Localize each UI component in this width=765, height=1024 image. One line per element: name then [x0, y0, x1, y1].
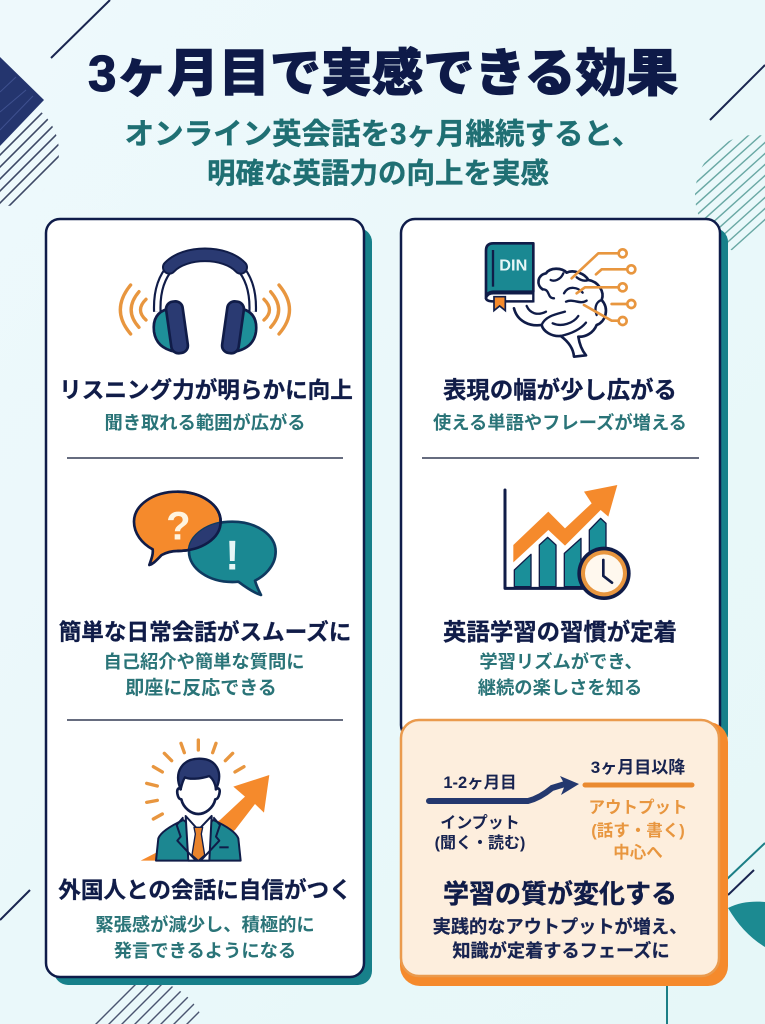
text: daily conversation detail: 即座に反応できる: [125, 677, 277, 699]
icon: headphones: [120, 253, 289, 354]
text: daily conversation detail: [103, 651, 305, 699]
icon: speech bubbles: [134, 492, 276, 595]
decorative shapes: top right: [695, 64, 765, 250]
diagram: input to output: 1-2ヶ月目: [443, 774, 517, 792]
diagram: input to output: インプット: [440, 814, 520, 832]
icon: confident businessperson: [141, 740, 269, 861]
text: expression detail: 使える単語やフレーズが増える: [433, 412, 687, 433]
diagram: input to output: 3ヶ月目以降: [591, 758, 685, 777]
text: learning quality detail: 実践的なアウトプットが増え、: [433, 916, 687, 937]
heading: habit: 英語学習の習慣が定着: [443, 618, 677, 645]
diagram: input to output: (聞く・読む): [435, 834, 525, 852]
text: learning quality detail: [433, 916, 687, 961]
diagram: input to output: 中心へ: [613, 843, 663, 862]
text: confidence detail: 発言できるようになる: [114, 940, 296, 961]
subtitle: [125, 118, 641, 190]
diagram: input to output: [429, 758, 692, 862]
text: habit detail: 学習リズムができ、: [479, 651, 643, 672]
diagram: input to output: (話す・書く): [591, 820, 685, 840]
title: 3ヶ月目で実感できる効果: [88, 45, 678, 102]
icon: growth chart with clock: [505, 485, 631, 600]
subtitle: 明確な英語力の向上を実感: [207, 158, 549, 190]
text: daily conversation detail: 自己紹介や簡単な質問に: [103, 651, 305, 672]
decorative shapes: bottom right: [667, 843, 765, 1024]
diagram: input to output: アウトプット: [588, 798, 688, 817]
panel: left card: [46, 219, 372, 985]
decorative shapes: bottom left: [0, 889, 200, 1024]
heading: expression: 表現の幅が少し広がる: [443, 376, 677, 403]
heading: learning quality: 学習の質が変化する: [443, 879, 677, 909]
icon: book and brain: DIN: [499, 258, 527, 275]
text: listening detail: 聞き取れる範囲が広がる: [104, 412, 306, 433]
icon: book and brain: [486, 243, 635, 357]
panel: learning quality callout: [400, 720, 728, 986]
text: habit detail: [478, 651, 643, 698]
subtitle: オンライン英会話を3ヶ月継続すると、: [125, 118, 641, 151]
heading: confidence: 外国人との会話に自信がつく: [58, 877, 352, 903]
decorative shapes: top left: [0, 0, 111, 206]
text: confidence detail: [95, 914, 315, 961]
icon: speech bubbles: ?: [166, 504, 191, 548]
text: habit detail: 継続の楽しさを知る: [478, 677, 642, 698]
text: learning quality detail: 知識が定着するフェーズに: [452, 940, 670, 961]
heading: listening: リスニング力が明らかに向上: [59, 377, 353, 403]
icon: speech bubbles: !: [225, 531, 239, 578]
text: confidence detail: 緊張感が減少し、積極的に: [95, 914, 315, 935]
panel: right card: [401, 219, 728, 748]
heading: daily conversation: 簡単な日常会話がスムーズに: [59, 619, 351, 645]
